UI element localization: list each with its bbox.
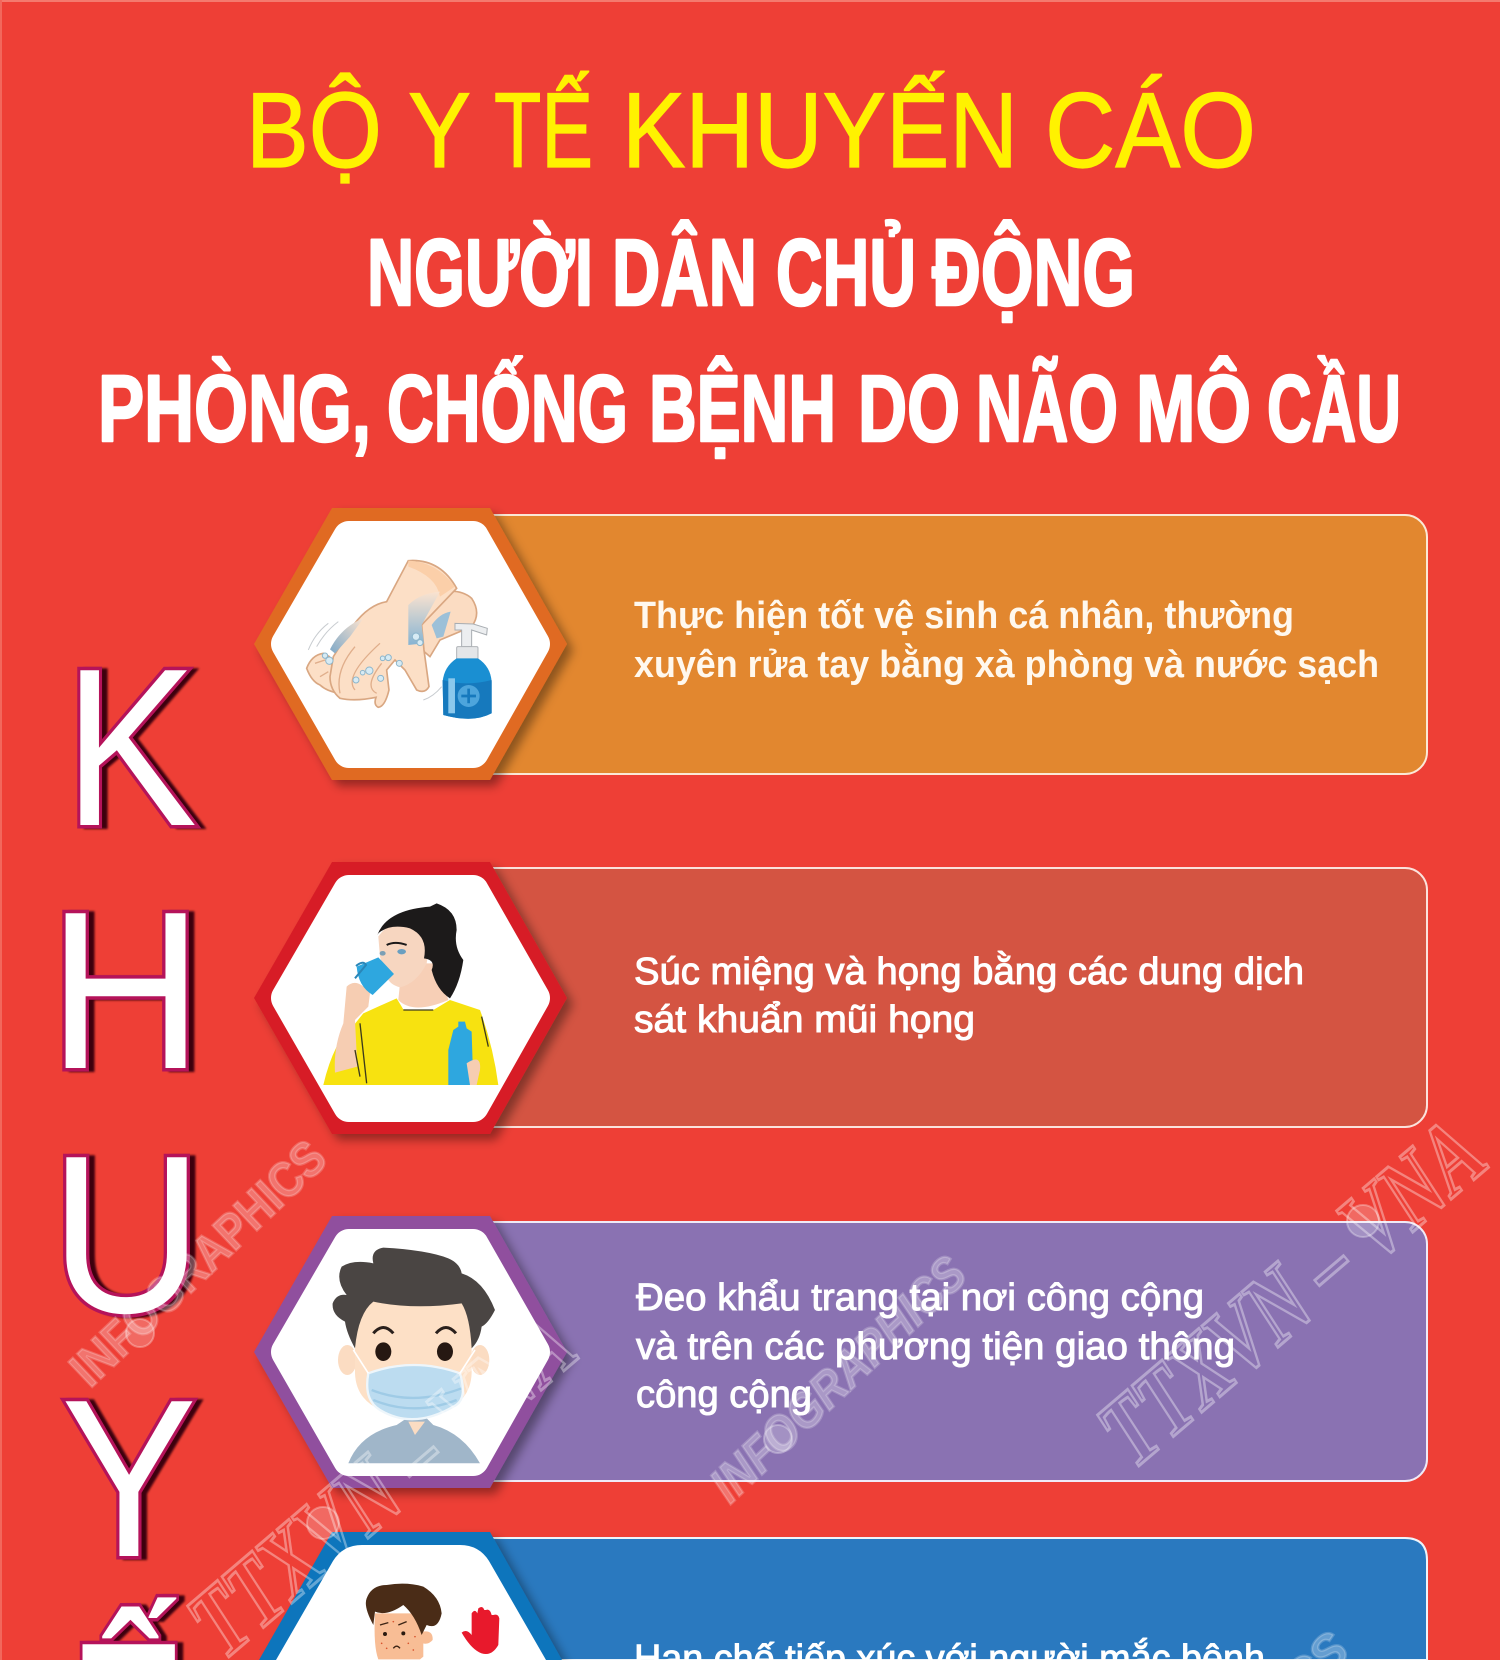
letter K: K: [70, 622, 203, 874]
heading: Bộ Y tế khuyến cáo: CÁO: [1045, 70, 1256, 190]
panel: gargling: [254, 862, 1427, 1134]
heading: Bộ Y tế khuyến cáo: KHUYẾN: [622, 70, 1018, 190]
hexagon frame: [254, 1216, 567, 1488]
advice text: Thực hiện tốt vệ sinh cá nhân, thường: [634, 595, 1294, 637]
text box: [440, 1538, 1427, 1660]
text box: [440, 868, 1427, 1127]
letter H: H: [48, 864, 203, 1116]
advice text: [636, 1277, 1235, 1416]
watermark: infographics left: INFOGRAPHICS: [59, 1129, 337, 1397]
heading: Bộ Y tế khuyến cáo: TẾ: [494, 70, 593, 190]
letter U: U: [56, 1109, 209, 1361]
advice text: [634, 595, 1379, 686]
subheading line 2: NÃO: [976, 356, 1118, 462]
panel: face mask: [254, 1216, 1427, 1488]
advice text: và trên các phương tiện giao thông: [636, 1326, 1235, 1368]
advice text: sát khuẩn mũi họng: [634, 999, 975, 1041]
subheading line 1: CHỦ: [776, 220, 916, 326]
subheading line 2: CHỐNG: [387, 356, 628, 462]
vertical word KHUYẾN: [48, 621, 209, 1660]
advice text: xuyên rửa tay bằng xà phòng và nước sạch: [634, 642, 1379, 686]
subheading line 2: BỆNH: [649, 356, 836, 462]
letter H: H: [54, 865, 209, 1117]
panel: limit contact: [259, 1532, 1427, 1660]
advice text: công cộng: [636, 1374, 812, 1416]
subheading line 2: CẦU: [1267, 356, 1401, 462]
subheading line 2: MÔ: [1136, 356, 1251, 462]
letter Y: Y: [67, 1353, 203, 1605]
text box: [440, 515, 1427, 774]
letter K: K: [64, 621, 197, 873]
text box: [440, 1222, 1427, 1481]
subheading line 1: [367, 219, 1135, 326]
title: [98, 70, 1401, 462]
hexagon frame: [254, 862, 567, 1134]
heading: Bộ Y tế khuyến cáo: [246, 70, 1256, 190]
icon: man wearing mask: [333, 1248, 495, 1463]
subheading line 2: [98, 356, 1401, 462]
hexagon frame: [259, 1532, 562, 1660]
hexagon frame: [254, 508, 567, 780]
icon: hands and soap bottle: [307, 560, 492, 719]
letter Y: Y: [61, 1352, 197, 1604]
advice text: Đeo khẩu trang tại nơi công cộng: [636, 1277, 1204, 1319]
subheading line 2: DO: [858, 356, 960, 462]
subheading line 1: ĐỘNG: [932, 220, 1135, 326]
icon: sick man and stop hand: [366, 1584, 499, 1659]
advice text: Súc miệng và họng bằng các dung dịch: [634, 950, 1304, 993]
heading: Bộ Y tế khuyến cáo: BỘ: [246, 70, 382, 190]
watermark: infographics centre: INFOGRAPHICS: [699, 1245, 977, 1513]
watermark globes: [126, 1205, 1379, 1539]
panel: hand washing: [254, 508, 1427, 780]
letter U: U: [50, 1108, 203, 1360]
heading: Bộ Y tế khuyến cáo: Y: [408, 70, 471, 190]
icon: woman drinking: [323, 903, 498, 1085]
subheading line 1: DÂN: [612, 219, 757, 326]
subheading line 1: NGƯỜI: [367, 220, 593, 326]
advice text: [634, 950, 1304, 1041]
subheading line 2: PHÒNG,: [98, 356, 371, 462]
